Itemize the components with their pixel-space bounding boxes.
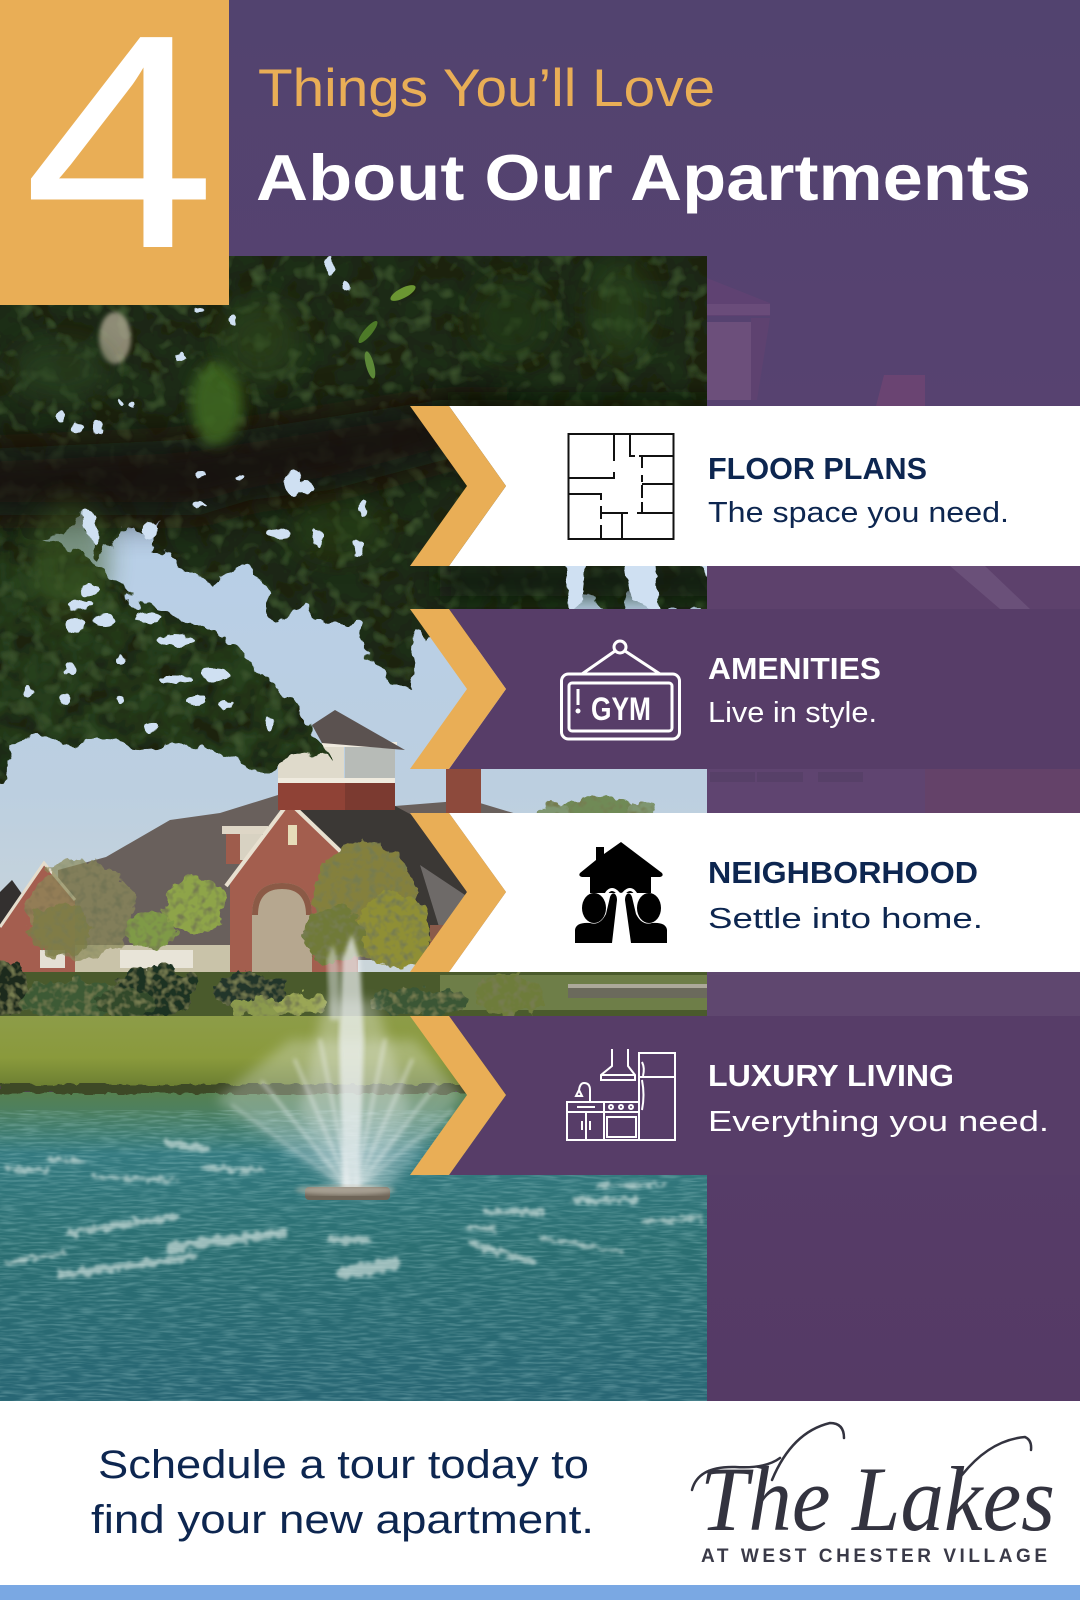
heading: AMENITIES — [708, 651, 881, 686]
tower — [278, 783, 345, 810]
bottom blue bar — [0, 1585, 1080, 1600]
row: amenities — [410, 609, 1080, 769]
ribbon background — [449, 1016, 1080, 1175]
logo: The Lakes at West Chester Village: The Lakes — [700, 1448, 1055, 1550]
tree foliage — [0, 256, 707, 784]
sky — [0, 510, 707, 972]
ribbon background — [449, 609, 1080, 769]
foliage shadows at right — [440, 400, 740, 596]
icon: gym sign — [562, 641, 680, 739]
icon: kitchen — [567, 1049, 675, 1140]
main title: About Our Apartments — [256, 141, 1031, 214]
sky glimpses through leaves — [24, 255, 720, 732]
ornamental trees — [26, 842, 431, 968]
footer white band — [0, 1401, 1080, 1585]
water — [0, 1092, 707, 1401]
row: neighborhood — [410, 813, 1080, 972]
water ripples — [0, 1110, 707, 1401]
chimney — [446, 769, 481, 814]
description: The space you need. — [708, 497, 1009, 529]
icon: gym sign: GYM — [591, 691, 651, 727]
header: title text — [256, 59, 1031, 214]
logo: The Lakes at West Chester Village: AT WEST CHESTER VILLAGE — [701, 1546, 1047, 1567]
description: Live in style. — [708, 697, 877, 729]
heading: FLOOR PLANS — [708, 451, 927, 486]
clubhouse building — [0, 710, 540, 985]
description: Settle into home. — [708, 903, 983, 935]
shrubs and road — [0, 964, 707, 1020]
chevron — [410, 813, 506, 972]
row: luxury living — [410, 1016, 1080, 1175]
call to action text: find your new apartment. — [91, 1498, 594, 1542]
heading: NEIGHBORHOOD — [708, 855, 978, 890]
description: Everything you need. — [708, 1106, 1049, 1138]
subtitle: Things You’ll Love — [258, 59, 715, 118]
ribbon background — [449, 813, 1080, 972]
chevron — [410, 1016, 506, 1175]
foliage highlights — [10, 260, 650, 620]
call to action text — [91, 1443, 594, 1542]
icon: floor plan — [568, 434, 674, 539]
icon: hands holding house — [575, 842, 667, 943]
grassy bank — [0, 1083, 506, 1095]
dark branch band — [0, 400, 520, 515]
chevron — [410, 406, 506, 566]
background trees — [536, 795, 655, 813]
row: floor plans — [410, 406, 1080, 566]
ribbon background — [449, 406, 1080, 566]
photo: lake, fountain, clubhouse and tree — [0, 256, 707, 1401]
call to action text: Schedule a tour today to — [98, 1443, 589, 1487]
faint building ghost in purple panel — [707, 278, 1080, 1016]
chevron — [410, 609, 506, 769]
fountain — [216, 934, 462, 1200]
heading: LUXURY LIVING — [708, 1058, 954, 1093]
surface spray streaks — [5, 1143, 702, 1275]
lawn — [0, 1016, 498, 1086]
header: orange number block — [0, 0, 229, 312]
logo: The Lakes at West Chester Village — [692, 1423, 1055, 1567]
